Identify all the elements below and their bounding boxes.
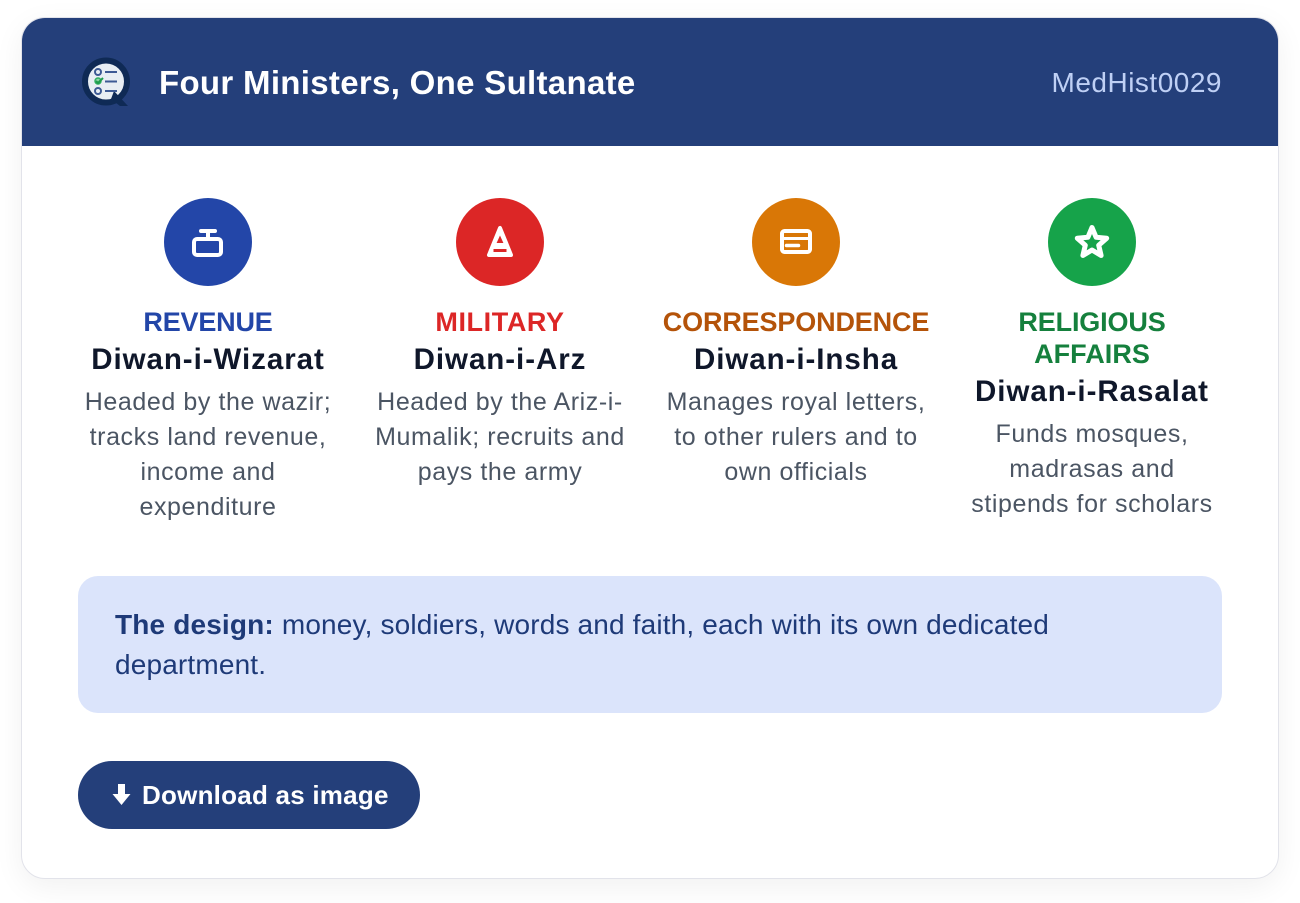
- icon: military: [456, 198, 544, 286]
- description: [971, 420, 1213, 518]
- name: Diwan-i-Arz: [414, 343, 586, 376]
- text: Funds mosques,: [996, 420, 1188, 448]
- text: Headed by the wazir;: [85, 388, 331, 416]
- icon: religious affairs: [1048, 198, 1136, 286]
- panel: revenue: [85, 198, 331, 521]
- panel: military: [375, 198, 625, 486]
- text: expenditure: [139, 493, 277, 521]
- icon: revenue: [164, 198, 252, 286]
- callout text: The design: money, soldiers, words and faith, each with its own dedicated: [115, 609, 1049, 640]
- name: Diwan-i-Rasalat: [975, 375, 1209, 408]
- code label: MedHist0029: [1052, 67, 1222, 98]
- category: CORRESPONDENCE: [663, 307, 929, 337]
- text: tracks land revenue,: [90, 423, 326, 451]
- text: stipends for scholars: [971, 490, 1213, 518]
- text: Headed by the Ariz-i-: [377, 388, 623, 416]
- description: [85, 388, 331, 521]
- icon: quiz logo: [82, 58, 130, 106]
- panel: correspondence: [663, 198, 929, 486]
- text: own officials: [724, 458, 868, 486]
- name: Diwan-i-Insha: [694, 343, 898, 376]
- icon: correspondence: [752, 198, 840, 286]
- name: Diwan-i-Wizarat: [91, 343, 325, 376]
- text: madrasas and: [1009, 455, 1175, 483]
- text: Mumalik; recruits and: [375, 423, 625, 451]
- description: [667, 388, 925, 486]
- text: to other rulers and to: [674, 423, 918, 451]
- text: Manages royal letters,: [667, 388, 925, 416]
- icon: down arrow: [112, 784, 130, 805]
- download button: [78, 761, 420, 829]
- callout: [78, 576, 1222, 713]
- category second line: AFFAIRS: [1034, 339, 1150, 369]
- callout text: department.: [115, 649, 266, 680]
- category: REVENUE: [143, 307, 273, 337]
- category: RELIGIOUS: [1018, 307, 1166, 337]
- text: income and: [140, 458, 276, 486]
- button label: Download as image: [142, 780, 389, 810]
- title: Four Ministers, One Sultanate: [159, 64, 636, 101]
- category: MILITARY: [435, 307, 565, 337]
- panel: religious affairs: [971, 198, 1213, 518]
- description: [375, 388, 625, 486]
- header band: [22, 18, 1278, 146]
- callout text: [115, 609, 1049, 680]
- text: pays the army: [418, 458, 582, 486]
